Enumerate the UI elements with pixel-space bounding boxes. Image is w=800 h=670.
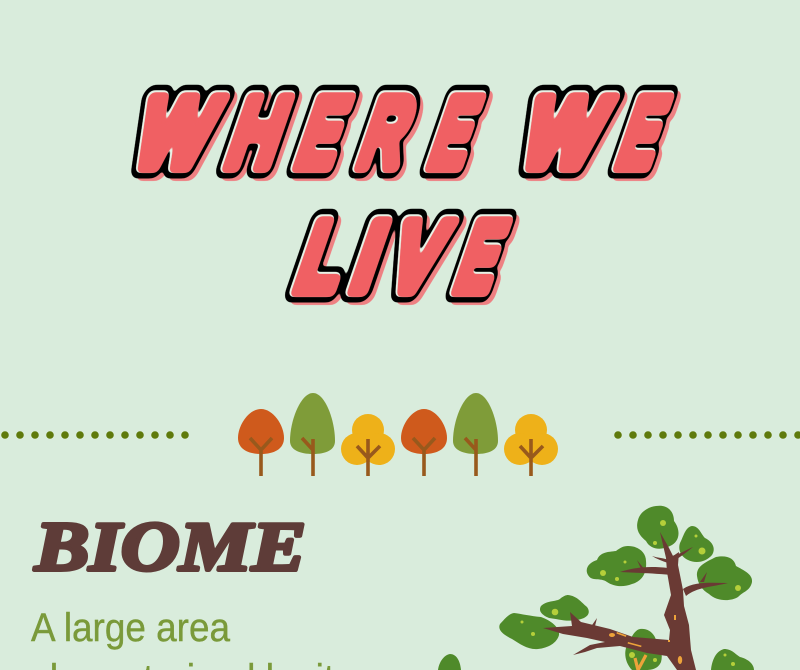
title: where we live: I [339,199,399,311]
title: where we live: E [605,75,681,187]
small sapling stem [635,655,646,670]
title: where we live: I [339,199,399,311]
title: where we live: W [125,79,236,192]
title: where we live: W [508,75,622,187]
title: where we live: H [214,75,302,187]
title: where we live: R [345,76,427,188]
title: where we live: E [443,199,519,311]
title: where we live: E [605,75,681,187]
title: where we live: W [121,75,232,188]
title: where we live: L [282,200,364,312]
title: where we live: L [283,201,365,313]
title: where we live: V [374,201,461,312]
title: where we live: E [444,200,520,312]
title: where we live: V [374,201,461,312]
foliage clusters [438,506,754,670]
dotted divider left [1,431,189,439]
icon: orange tree [401,409,447,476]
icon: green tree [290,393,335,476]
foliage highlights [520,520,741,666]
title: where we live: W [122,76,233,189]
title: where we live: E [443,199,519,311]
title: where we live: E [284,77,363,189]
icon: yellow tree [341,414,395,476]
title: where we live: W [512,79,626,191]
icon row: small trees [238,393,558,476]
title: where we live: R [346,77,428,189]
title: where we live: V [375,202,462,313]
title: where we live: E [418,76,494,188]
title: where we live: R [349,80,431,192]
title: where we live: W [121,75,232,188]
title: where we live: E [283,76,362,188]
heading: biome: BIOME [34,509,306,586]
text block: biome definition [31,606,353,670]
title: where we live: E [447,203,523,315]
title: where we live: H [215,76,303,188]
bark marks [609,615,682,664]
title: where we live: H [218,79,306,191]
title: where we live: E [417,75,493,187]
title: where we live: W [508,75,622,187]
text block: biome definition: A large area [31,606,231,650]
dotted divider right [614,431,800,439]
title: where we live: E [287,80,366,192]
icon: orange tree [238,409,284,476]
trunk and branches [543,532,728,670]
title: where we live: R [345,76,427,188]
title: where we live: E [421,79,497,191]
illustration: bonsai tree [438,506,754,670]
title: where we live: E [417,75,493,187]
title: where we live [121,75,685,316]
title: where we live: L [282,200,364,312]
icon: green tree [453,393,498,476]
title: where we live: W [509,76,623,188]
title: where we live: V [378,205,465,316]
title: where we live: H [214,75,302,187]
title: where we live: E [283,76,362,188]
title: where we live: E [609,79,685,191]
title: where we live: E [606,76,682,188]
title: where we live: I [340,200,400,312]
icon: yellow tree [504,414,558,476]
title: where we live: I [343,203,403,315]
title: where we live: L [286,204,368,316]
